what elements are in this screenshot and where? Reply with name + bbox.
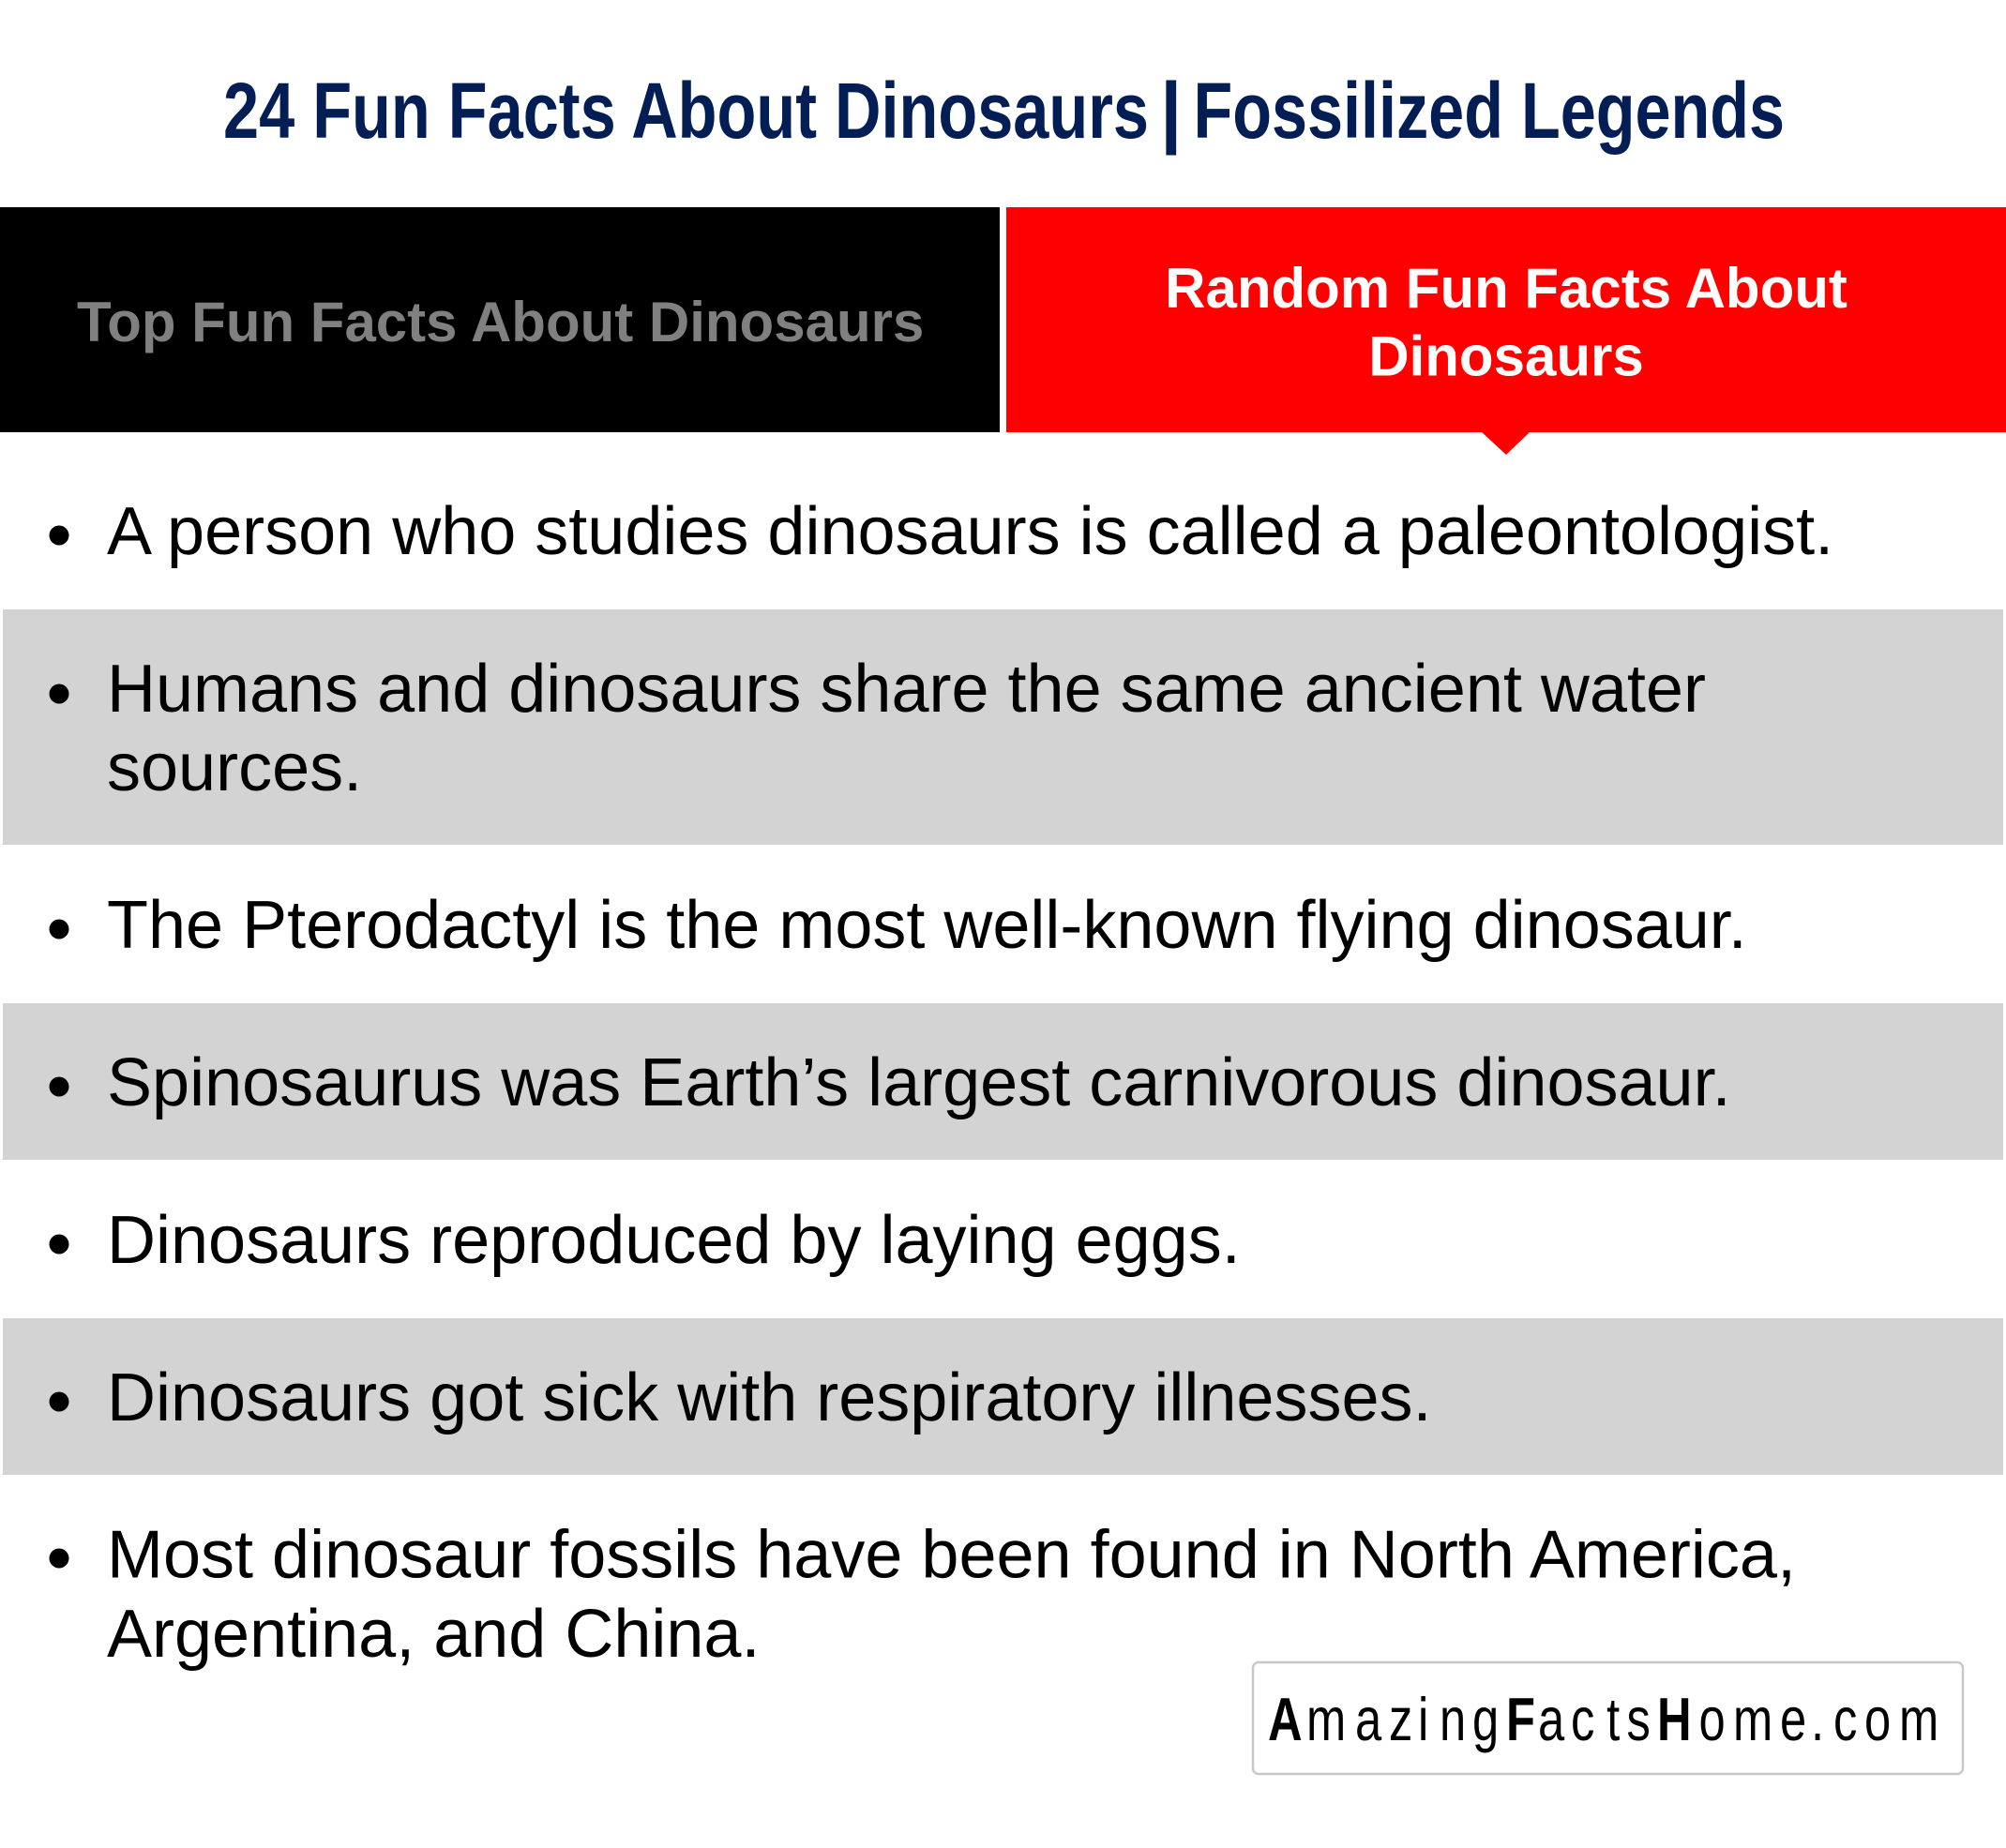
fact 3 text: The Pterodactyl is the most well-known flying dinosaur. (107, 888, 1747, 963)
fact 2 text: Humans and dinosaurs share the same ancient water (107, 652, 1706, 727)
fact 6 row (3, 1318, 2003, 1475)
tab label: random fun facts: Dinosaurs (1368, 324, 1644, 388)
fact 7 text: Most dinosaur fossils have been found in North America, (107, 1517, 1796, 1592)
fact 4 row (3, 1003, 2003, 1160)
fact 1 text: A person who studies dinosaurs is called a paleontologist. (107, 494, 1833, 569)
tab: random fun facts (active) (1006, 207, 2006, 455)
title: 24 Fun Facts About Dinosaurs (223, 67, 1149, 155)
title: Fossilized Legends (1193, 67, 1785, 155)
fact 2 row (3, 609, 2003, 845)
watermark text: AmazingFactsHome.com (1268, 1686, 1938, 1753)
title: | (1160, 67, 1183, 156)
fact 4 text: Spinosaurus was Earth’s largest carnivorous dinosaur. (107, 1045, 1731, 1120)
fact 7 text: Argentina, and China. (107, 1597, 760, 1672)
tab label: random fun facts: Random Fun Facts About (1165, 257, 1848, 320)
fact 6 text: Dinosaurs got sick with respiratory illnesses. (107, 1360, 1432, 1435)
watermark badge (1253, 1662, 1963, 1774)
fact 5 row (49, 1203, 1241, 1278)
tab: top fun facts (inactive) (0, 207, 1000, 432)
tab label: top fun facts: Top Fun Facts About Dinosaurs (77, 291, 924, 353)
tab pointer arrow (1481, 431, 1531, 455)
fact 2 text: sources. (107, 730, 362, 805)
fact 7 row (49, 1517, 1796, 1672)
fact 1 row (49, 494, 1833, 569)
fact 3 row (49, 888, 1747, 963)
fact 5 text: Dinosaurs reproduced by laying eggs. (107, 1203, 1241, 1278)
